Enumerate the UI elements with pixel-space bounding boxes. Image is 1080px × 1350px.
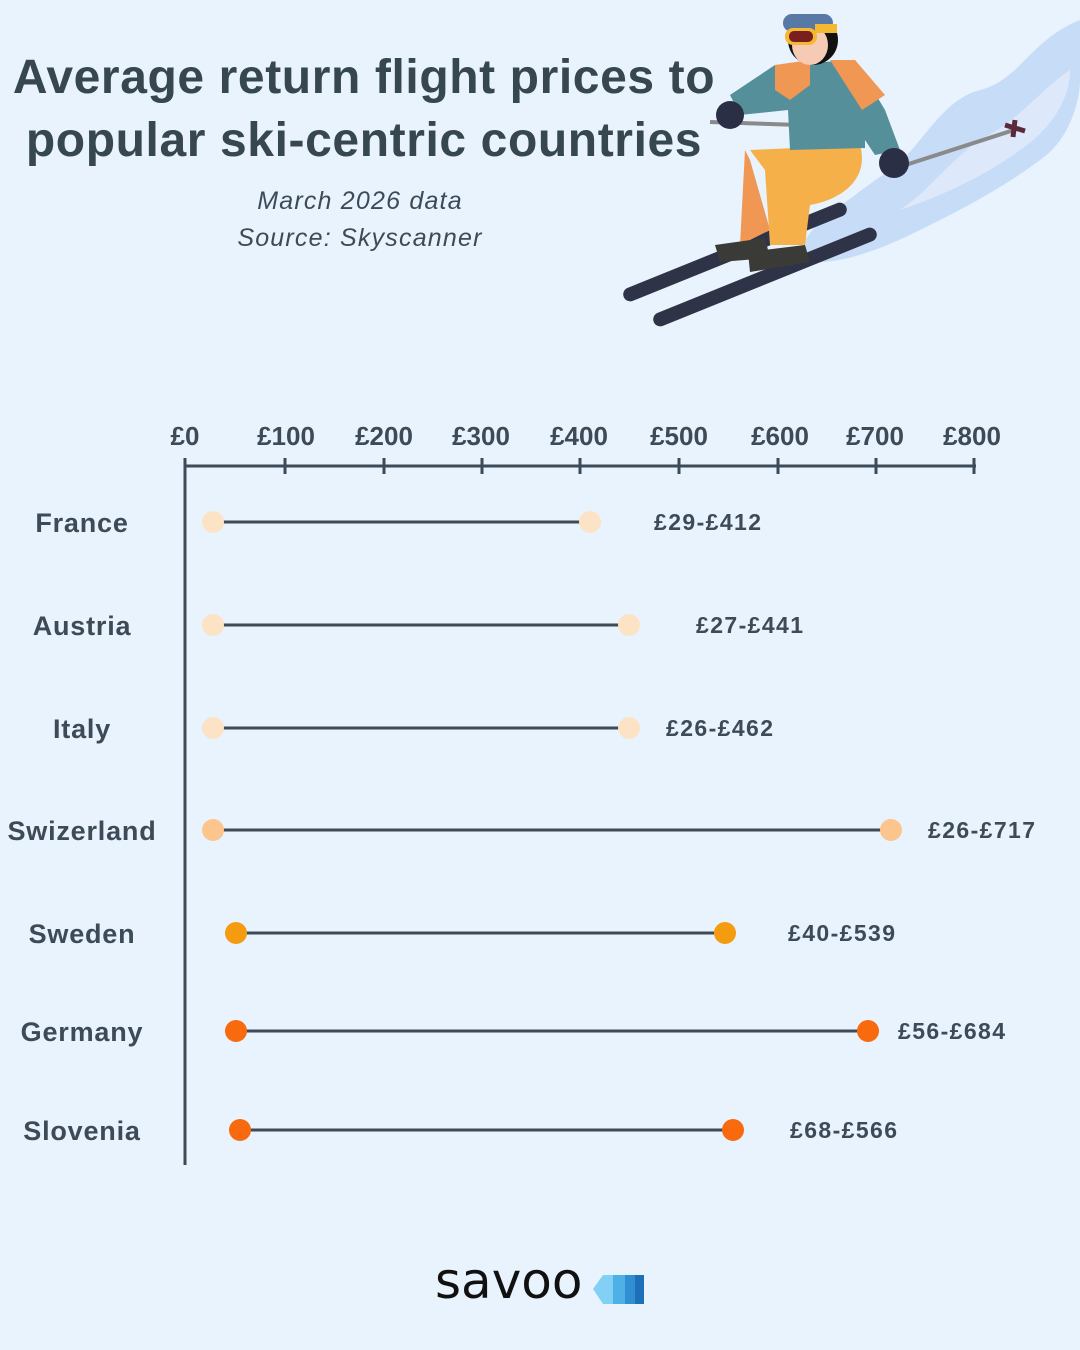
country labels: Slovenia (23, 1116, 141, 1146)
value labels: £29-£412 (654, 509, 762, 535)
value labels (654, 509, 1036, 1143)
x axis: £100 (257, 421, 315, 451)
x axis (171, 421, 1001, 1165)
illustration: skier (623, 14, 1080, 326)
chart (7, 421, 1036, 1165)
value labels: £40-£539 (788, 920, 896, 946)
country labels: Sweden (29, 919, 135, 949)
range lines and dots (213, 522, 891, 1130)
subtitle: March 2026 data (257, 187, 463, 215)
value labels: £26-£717 (928, 817, 1036, 843)
country labels (7, 508, 157, 1146)
title (13, 51, 715, 167)
title: Average return flight prices to (13, 51, 715, 104)
x axis: £200 (355, 421, 413, 451)
country labels: Austria (33, 611, 131, 641)
country labels: France (35, 508, 129, 538)
title: popular ski-centric countries (26, 114, 702, 167)
x axis: £700 (846, 421, 904, 451)
country labels: Italy (53, 714, 111, 744)
logo: savoo: savoo (435, 1252, 582, 1310)
x axis: £400 (550, 421, 608, 451)
country labels: Germany (21, 1017, 143, 1047)
value labels: £56-£684 (898, 1018, 1006, 1044)
value labels: £26-£462 (666, 715, 774, 741)
x axis: £500 (650, 421, 708, 451)
x axis: £600 (751, 421, 809, 451)
x axis: £300 (452, 421, 510, 451)
value labels: £68-£566 (790, 1117, 898, 1143)
country labels: Swizerland (7, 816, 157, 846)
subtitle (237, 187, 483, 252)
x axis: £0 (171, 421, 199, 451)
subtitle: Source: Skyscanner (237, 224, 483, 252)
x axis: £800 (943, 421, 1001, 451)
value labels: £27-£441 (696, 612, 804, 638)
